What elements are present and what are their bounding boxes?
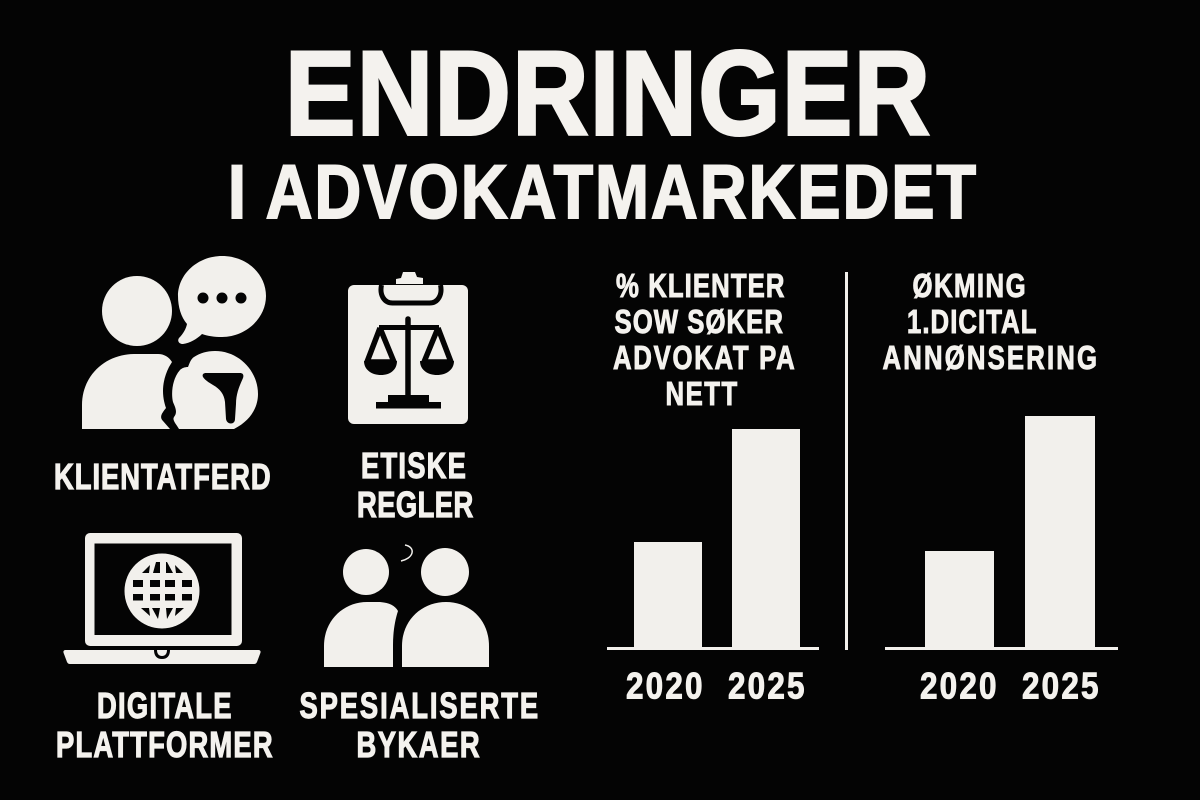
icon: specialised firms bbox=[324, 545, 489, 667]
right chart heading bbox=[882, 268, 1097, 377]
label: SPESIALISERTE BYKAER: BYKAER bbox=[356, 724, 480, 765]
label: SPESIALISERTE BYKAER: SPESIALISERTE bbox=[300, 685, 538, 726]
left chart heading: SOW SØKER bbox=[614, 304, 783, 341]
right bar chart: 2025 bbox=[1022, 666, 1099, 707]
title bbox=[228, 26, 976, 234]
label: DIGITALE PLATTFORMER: DIGITALE bbox=[97, 685, 232, 726]
label: ETISKE REGLER: ETISKE bbox=[361, 445, 466, 486]
left bar chart: 2025 bbox=[728, 666, 805, 707]
right chart heading: 1.DICITAL bbox=[907, 304, 1036, 341]
left chart heading: ADVOKAT PA bbox=[613, 340, 795, 377]
left bar chart bbox=[607, 429, 819, 707]
left bar chart: 2020 bbox=[626, 666, 703, 707]
icon: clipboard with scales bbox=[348, 272, 468, 424]
icon: client behaviour bbox=[82, 256, 266, 429]
icon: laptop with globe bbox=[63, 533, 261, 664]
right chart heading: ØKMING bbox=[912, 268, 1026, 305]
right chart heading: ANNØNSERING bbox=[882, 340, 1097, 377]
label: ETISKE REGLER bbox=[357, 445, 473, 525]
label: KLIENTATFERD: KLIENTATFERD bbox=[54, 456, 271, 497]
title: ENDRINGER bbox=[285, 26, 930, 160]
label: DIGITALE PLATTFORMER: PLATTFORMER bbox=[56, 724, 273, 765]
left chart heading: NETT bbox=[666, 376, 737, 413]
label: DIGITALE PLATTFORMER bbox=[56, 685, 273, 765]
left chart heading bbox=[613, 268, 795, 413]
label: ETISKE REGLER: REGLER bbox=[357, 484, 473, 525]
right bar chart: 2020 bbox=[920, 666, 997, 707]
right bar chart bbox=[885, 416, 1118, 707]
title: I ADVOKATMARKEDET bbox=[228, 149, 976, 234]
label: SPESIALISERTE BYKAER bbox=[300, 685, 538, 765]
left chart heading: % KLIENTER bbox=[616, 268, 784, 305]
